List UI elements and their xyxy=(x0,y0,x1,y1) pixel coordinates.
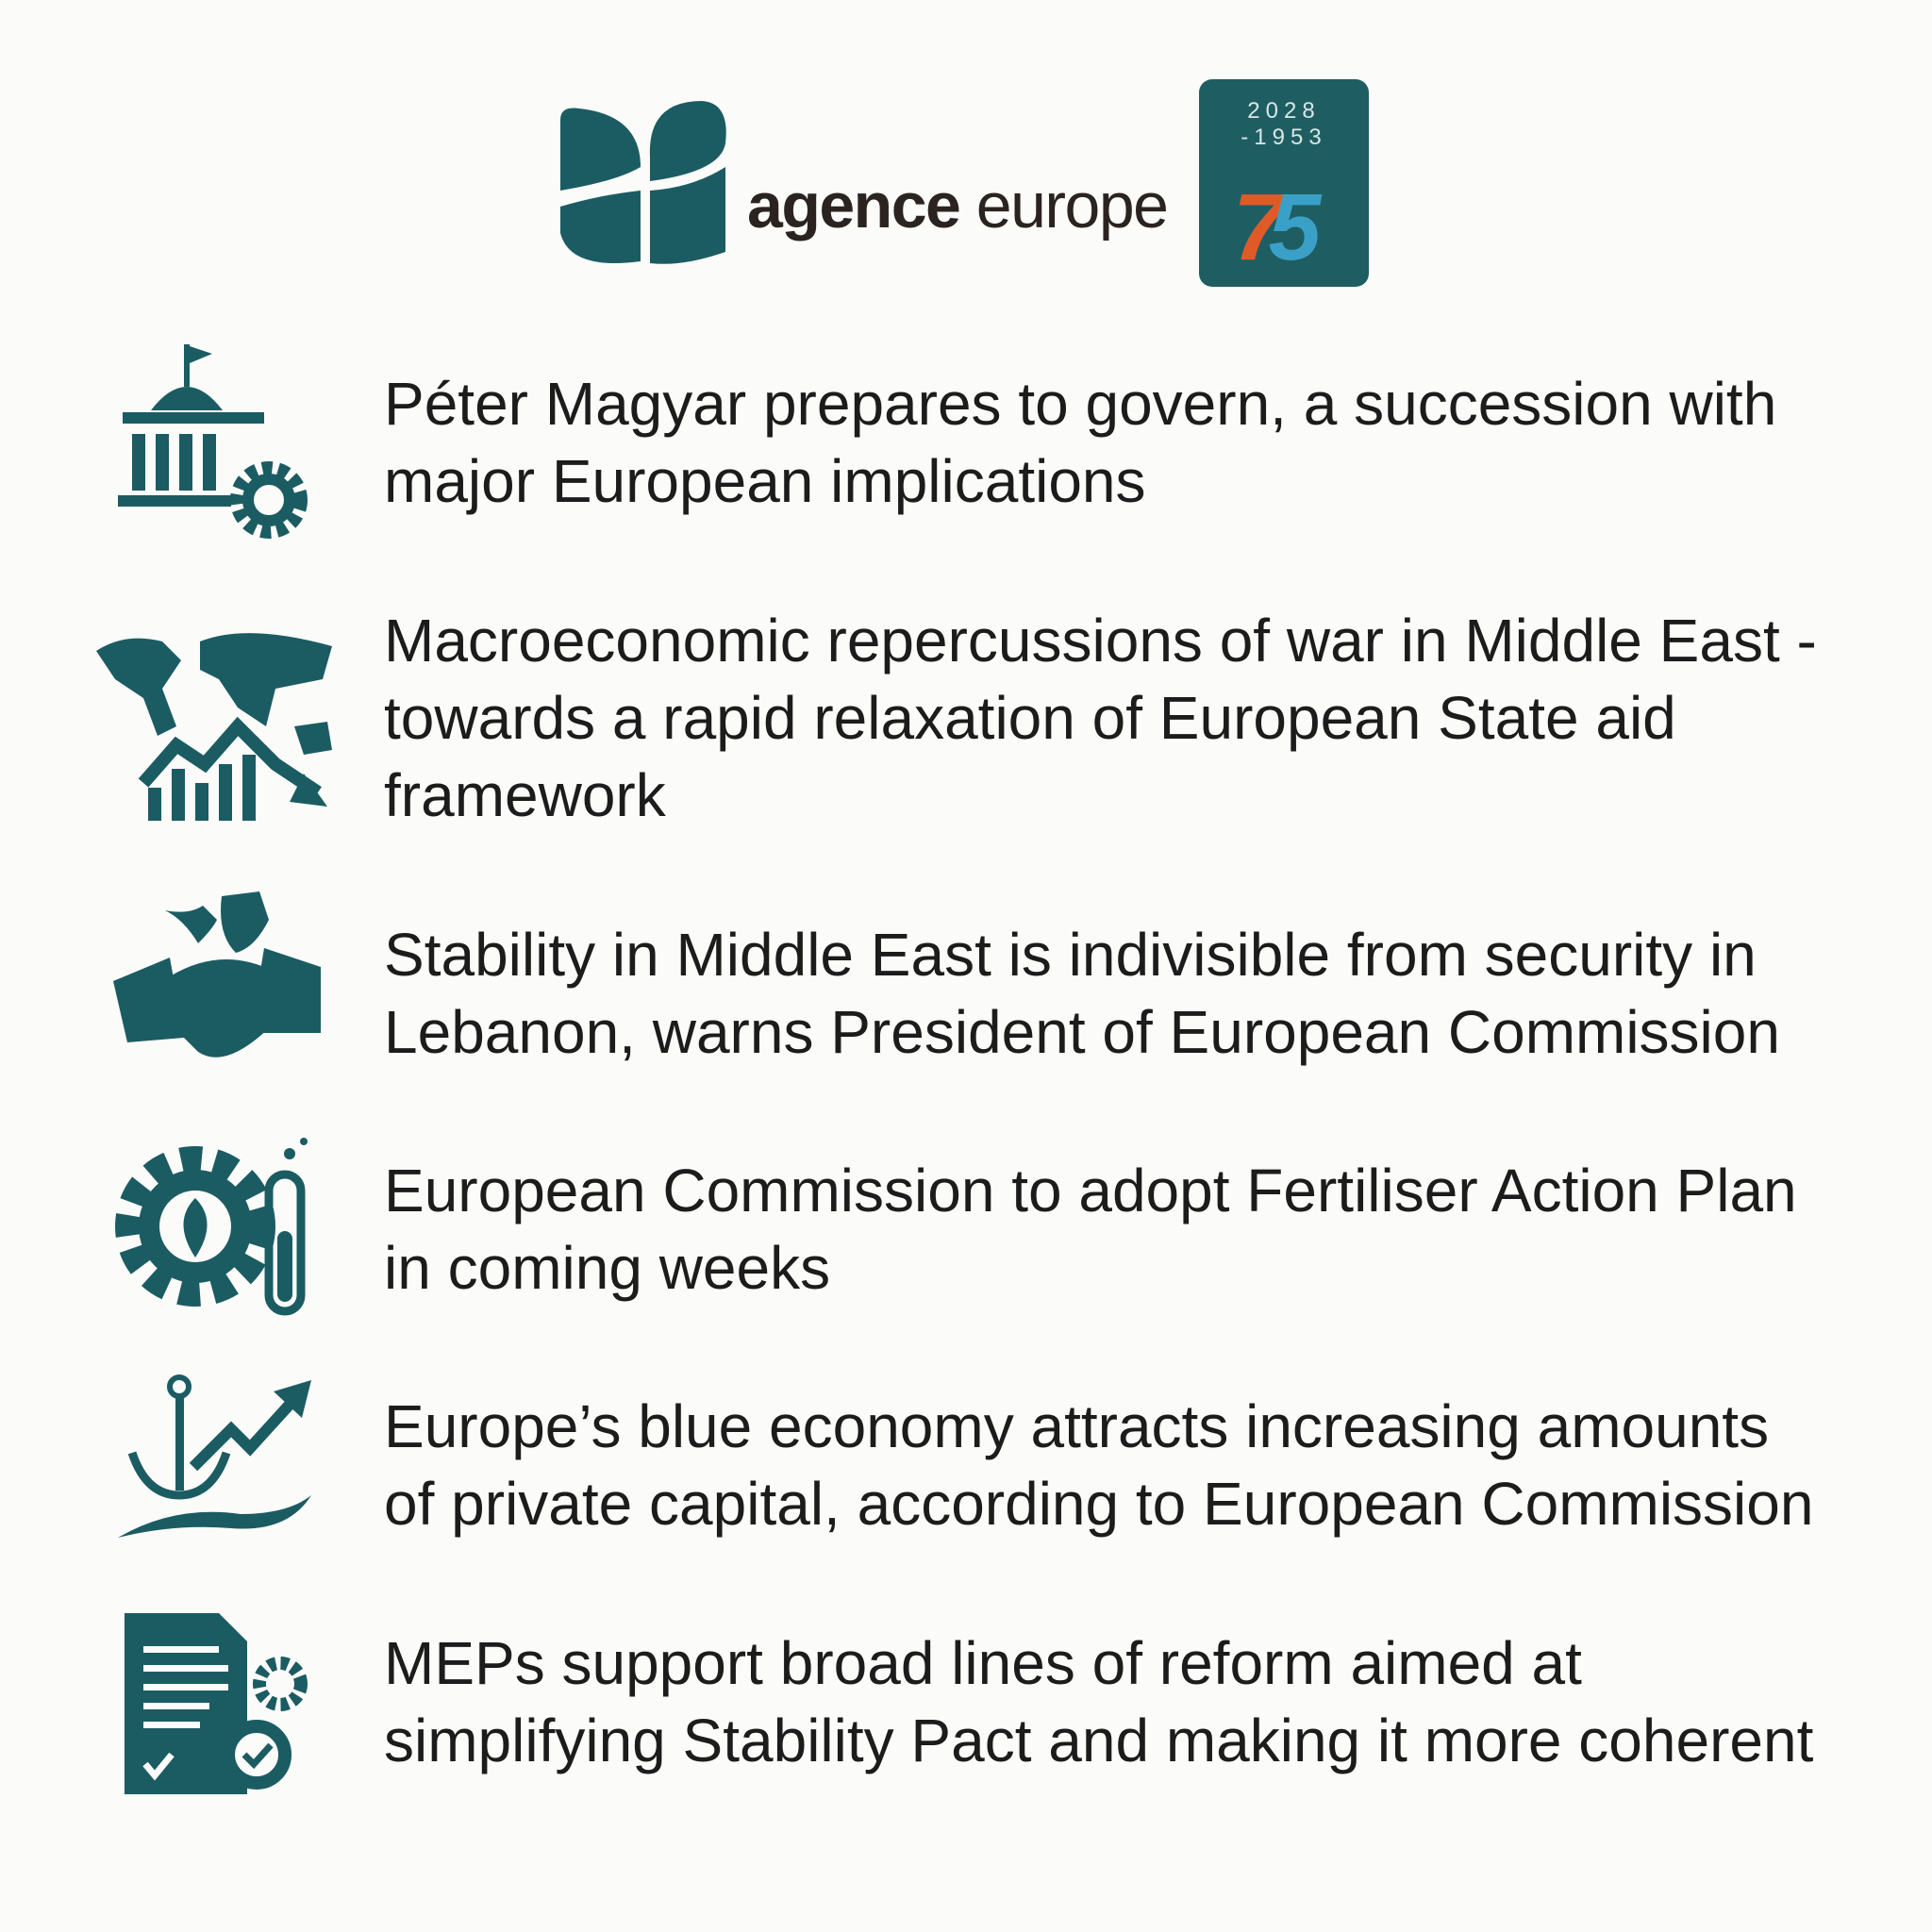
item 4 text: European Commission to adopt Fertiliser Action Plan xyxy=(384,1157,1797,1224)
item 1 text: Péter Magyar prepares to govern, a succession with xyxy=(384,370,1776,438)
item 6 text: simplifying Stability Pact and making it more coherent xyxy=(384,1707,1813,1774)
item 3 text xyxy=(384,921,1780,1066)
item 1 icon: government building with gear xyxy=(118,344,308,539)
item 1 text: major European implications xyxy=(384,447,1145,515)
logo mark xyxy=(560,101,726,264)
item 2 text: Macroeconomic repercussions of war in Middle East - xyxy=(384,607,1817,675)
item 4 icon: gear with leaf and test tube xyxy=(115,1138,308,1315)
badge: 75 years: 75 xyxy=(1233,175,1304,280)
item 3 icon: handshake with dove and shield xyxy=(113,891,321,1058)
badge: 75 years: -1953 xyxy=(1241,125,1327,150)
item 1 text xyxy=(384,370,1776,515)
item 2 text: towards a rapid relaxation of European State aid xyxy=(384,684,1676,752)
item 6 icon: document with gears xyxy=(125,1613,308,1794)
item 3 text: Stability in Middle East is indivisible from security in xyxy=(384,921,1757,989)
item 5 text xyxy=(384,1392,1813,1538)
item 2 icon: world map with chart xyxy=(96,633,332,821)
item 5 text: Europe’s blue economy attracts increasing amounts xyxy=(384,1392,1769,1460)
item 2 text xyxy=(384,607,1817,829)
item 6 text xyxy=(384,1629,1813,1774)
item 4 text xyxy=(384,1157,1797,1302)
badge: 75 years: 2028 xyxy=(1247,98,1321,124)
item 5 icon: anchor with waves and rising arrow xyxy=(118,1374,311,1538)
item 3 text: Lebanon, warns President of European Commission xyxy=(384,998,1780,1066)
item 2 text: framework xyxy=(384,761,666,829)
item 5 text: of private capital, according to European Commission xyxy=(384,1470,1813,1538)
logo wordmark: agence europe xyxy=(747,170,1168,242)
item 6 text: MEPs support broad lines of reform aimed at xyxy=(384,1629,1582,1697)
item 4 text: in coming weeks xyxy=(384,1234,830,1302)
badge: 75 years xyxy=(1199,79,1369,287)
